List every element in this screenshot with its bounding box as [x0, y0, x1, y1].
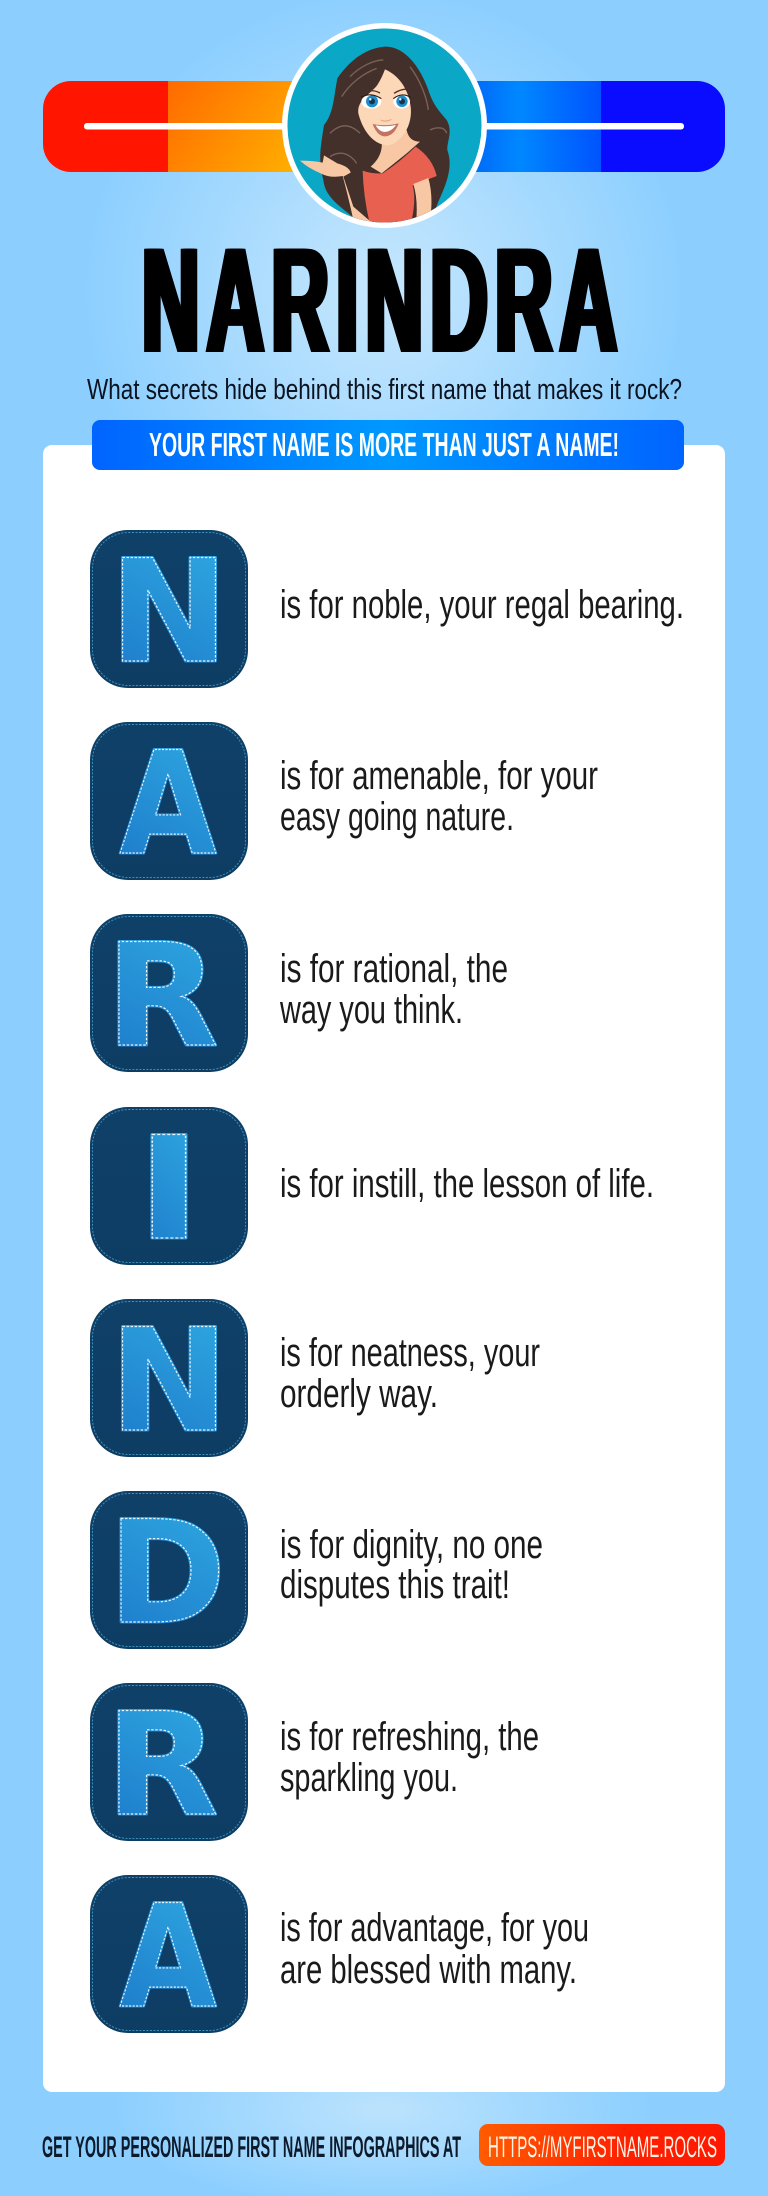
description: neatness: orderly way.: [280, 1372, 438, 1416]
eyes: [361, 95, 381, 109]
description: neatness: [280, 1331, 540, 1416]
description: advantage: is for advantage, for you: [280, 1906, 589, 1950]
description: refreshing: [280, 1715, 539, 1800]
description: amenable: easy going nature.: [280, 795, 514, 839]
badge: letter D: D: [108, 1491, 226, 1656]
description: advantage: are blessed with many.: [280, 1948, 577, 1992]
shirt: [363, 147, 437, 225]
badge: letter N: N: [110, 1299, 228, 1464]
footer URL button: [479, 2124, 725, 2166]
badge: letter I: I: [136, 1107, 202, 1272]
row: R for rational: [90, 914, 508, 1079]
row: A for amenable: [90, 722, 598, 887]
nose: [381, 119, 391, 121]
badge: letter I: [90, 1107, 248, 1272]
description: refreshing: sparkling you.: [280, 1756, 458, 1800]
face: [358, 69, 411, 145]
badge: letter R: R: [106, 1683, 218, 1848]
badge: letter R: R: [106, 914, 218, 1079]
description: amenable: [280, 754, 598, 839]
panel: white letter list: [43, 445, 725, 2092]
arms: [413, 178, 432, 217]
banner: [92, 420, 684, 470]
badge: letter R: R: [106, 914, 218, 1079]
badge: letter N: N: [110, 530, 228, 695]
badge: letter A: A: [120, 722, 217, 887]
eyebrows: [364, 89, 409, 93]
description: rational: way you think.: [279, 988, 463, 1032]
badge: letter A: A: [120, 1875, 217, 2040]
description: dignity: disputes this trait!: [280, 1563, 510, 1607]
badge: letter N: N: [110, 530, 228, 695]
row: D for dignity: [90, 1491, 543, 1656]
badge: letter I: I: [136, 1107, 202, 1272]
badge: letter R: [90, 1683, 248, 1848]
badge: letter A: [90, 722, 248, 887]
badge: letter A: [90, 1875, 248, 2040]
badge: letter R: R: [106, 1683, 218, 1848]
row: N for noble: [90, 530, 684, 695]
neck and chest: [371, 130, 420, 173]
row: I for instill: [90, 1107, 654, 1272]
badge: letter A: A: [120, 1875, 217, 2040]
description: dignity: is for dignity, no one: [280, 1523, 543, 1567]
mouth: [373, 123, 399, 136]
description: rational: [279, 947, 508, 1032]
title: NARINDRA: [142, 216, 625, 384]
header colour bar: [43, 81, 725, 172]
description: refreshing: is for refreshing, the: [280, 1715, 539, 1759]
illustration: smiling woman: [300, 47, 450, 227]
white bar line: [84, 123, 684, 130]
description: advantage: [280, 1906, 589, 1992]
badge: letter A: A: [120, 722, 217, 887]
row: A for advantage: [90, 1875, 589, 2040]
badge: letter R: [90, 914, 248, 1079]
description: dignity: [280, 1523, 543, 1607]
portrait medallion: [282, 23, 487, 228]
badge: letter N: N: [110, 1299, 228, 1464]
description: neatness: is for neatness, your: [280, 1331, 540, 1375]
description: amenable: is for amenable, for your: [280, 754, 598, 798]
row: N for neatness: [90, 1299, 540, 1464]
description: rational: is for rational, the: [280, 947, 508, 991]
badge: letter D: D: [108, 1491, 226, 1656]
row: R for refreshing: [90, 1683, 539, 1848]
